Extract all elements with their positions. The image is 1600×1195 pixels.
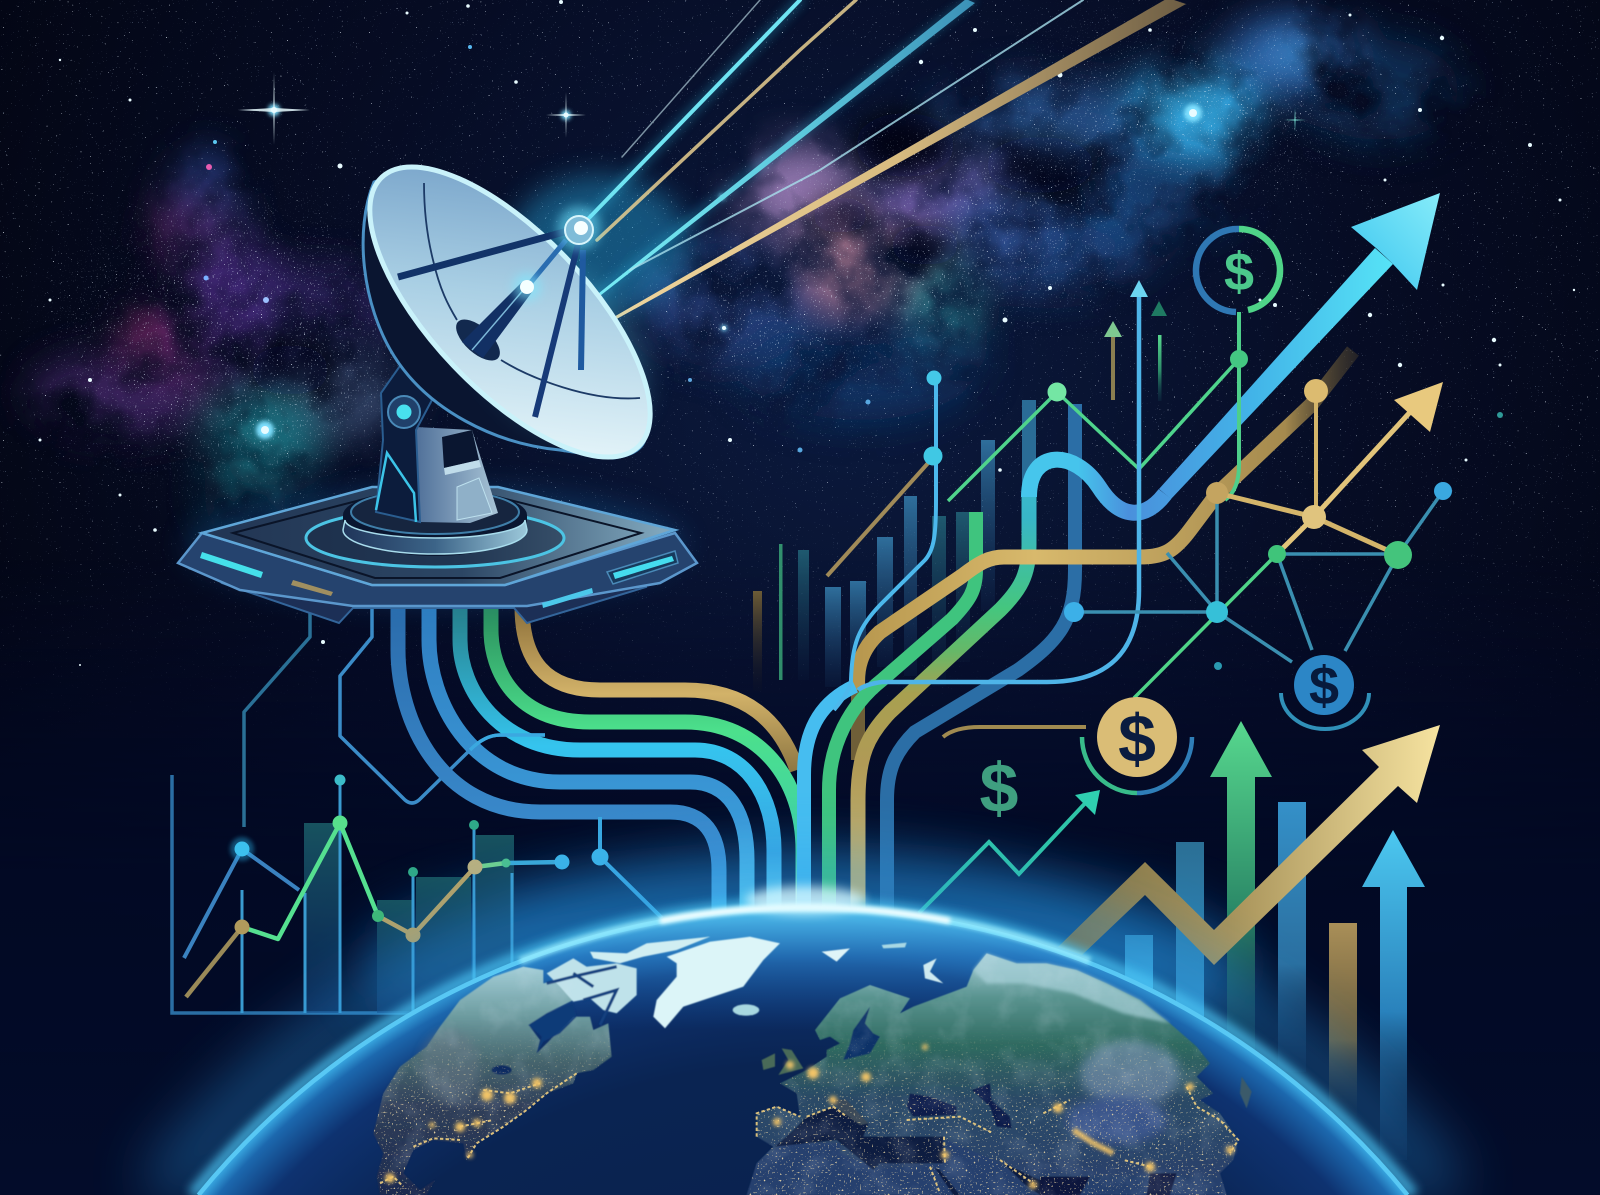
trace right <box>340 608 545 803</box>
gold and green chart line <box>186 823 562 997</box>
atmosphere rim <box>198 909 1408 1195</box>
arrow: dark green <box>1151 301 1167 401</box>
status bar right <box>607 551 678 584</box>
caspian sea <box>972 1083 1012 1128</box>
arrow: blue up <box>1362 830 1425 1160</box>
baltic sea <box>843 1007 880 1060</box>
column <box>376 363 498 523</box>
dish face <box>325 124 695 500</box>
ribbon: dark blue <box>398 606 719 925</box>
ribbon: dark blue fan <box>887 404 1075 925</box>
african and arabian land <box>747 1140 1033 1195</box>
continent: eurasia and north africa <box>747 943 1252 1195</box>
small up arrows <box>1104 280 1167 401</box>
ribbon: cyan <box>460 606 774 925</box>
arrow: gold zigzag <box>1058 725 1440 965</box>
dollar coin gold: $ <box>1118 701 1156 777</box>
continent: north america <box>373 937 780 1195</box>
top flare along rim <box>520 886 1090 961</box>
earth <box>162 880 1444 1195</box>
black sea <box>907 1093 957 1117</box>
atmosphere glow <box>162 880 1444 1195</box>
land texture <box>360 940 1260 1195</box>
dish back <box>363 172 646 458</box>
glow behind earth horizon <box>365 870 1245 1060</box>
italy <box>828 1098 868 1125</box>
green rising line chart <box>827 290 1248 710</box>
ribbon: gold main <box>858 351 1353 690</box>
bright stars <box>38 0 1575 666</box>
dollar ring top: $ <box>1224 242 1254 302</box>
dish glow <box>440 229 680 471</box>
american grey west <box>420 1030 480 1103</box>
line: thin cyan long <box>858 290 1139 690</box>
dark dust lanes <box>250 113 1095 395</box>
coastline city lights: eurasia <box>757 1087 1238 1193</box>
platform top <box>202 487 675 585</box>
tibet plateau <box>1067 1097 1167 1143</box>
himalaya light band <box>1073 1130 1113 1153</box>
platform inner panel <box>233 497 641 578</box>
ribbon: blue <box>429 606 747 925</box>
status bar left <box>200 552 263 578</box>
city glow clusters <box>385 1044 1234 1189</box>
greenland <box>653 937 780 1028</box>
hudson bay <box>528 1009 576 1050</box>
base collar <box>343 489 527 556</box>
chart axes <box>172 775 420 1013</box>
bright galaxy core <box>1150 39 1315 141</box>
british isles <box>762 1048 803 1075</box>
arrow: gold green <box>1104 321 1122 400</box>
ribbon fan: earth to charts <box>804 248 1393 925</box>
blue chart line <box>184 849 299 958</box>
ribbon: green fan <box>829 512 976 925</box>
northern siberia pale <box>973 953 1170 1023</box>
dollar coin gold <box>943 697 1192 793</box>
column cyan lines <box>376 453 416 522</box>
big arrowhead <box>1351 193 1440 290</box>
background bars: right chart <box>753 400 1036 760</box>
arrow: cyan <box>1130 280 1148 297</box>
cloud patch <box>1080 1040 1180 1107</box>
dollar ring top <box>1196 229 1280 312</box>
chart bars <box>304 823 514 1013</box>
red sea and gulf <box>935 1163 1040 1195</box>
column right panel <box>416 427 498 523</box>
teal zigzag arrow <box>919 790 1100 913</box>
glowing ring <box>306 509 564 567</box>
network graph <box>1064 379 1452 698</box>
network links: teal and blue <box>1074 491 1443 662</box>
beam: thin cyan <box>630 0 1083 270</box>
column window <box>442 430 479 468</box>
line: thin cyan branch <box>834 378 936 710</box>
trace left <box>244 608 310 827</box>
strut across dish <box>398 228 579 277</box>
arrow: green up <box>1210 721 1272 1060</box>
platform side <box>178 533 697 606</box>
rising bars and arrows lower right <box>1058 721 1440 1160</box>
dollar coin blue <box>1281 655 1369 729</box>
bottom fade to navy <box>0 560 1600 1195</box>
green dollar sign: $ <box>980 749 1018 827</box>
left line chart <box>172 774 570 1013</box>
nebula: left magenta and teal clouds <box>30 150 410 545</box>
svalbard <box>822 948 850 962</box>
pivot <box>388 396 420 428</box>
arrow: gold rising with green tail <box>1134 382 1443 698</box>
northern islands <box>590 937 710 963</box>
satellite dish station <box>178 124 697 623</box>
status bar gold <box>291 580 333 596</box>
nebula: milky way band at upper right <box>640 15 1460 420</box>
beam: cyan middle <box>594 0 975 299</box>
nodes on green line <box>1048 382 1066 402</box>
feed horn <box>462 282 532 358</box>
city lights texture <box>360 1030 1260 1195</box>
column window ledge <box>444 460 481 475</box>
beam: cyan top <box>589 0 800 218</box>
arctic straits <box>547 967 617 1025</box>
ribbon: green <box>491 606 803 925</box>
ribbon: gold <box>522 606 797 770</box>
hub <box>557 206 601 250</box>
coastline city lights: america <box>380 1073 577 1187</box>
beam: gold top <box>597 0 856 240</box>
trace overlapping ribbons <box>470 735 545 750</box>
dish panel arcs <box>424 183 640 398</box>
network nodes <box>1206 482 1228 504</box>
circuit traces from platform <box>244 608 545 827</box>
node on lower ribbon <box>592 817 662 918</box>
column left <box>376 363 432 522</box>
ribbon: big arrow hump <box>1029 460 1165 513</box>
great lakes <box>492 1065 512 1075</box>
mediterranean sea <box>775 1107 943 1170</box>
ocean top light <box>411 912 1196 1018</box>
beam: gold lower <box>612 0 1186 321</box>
platform <box>178 485 697 623</box>
signal beams from dish feed <box>510 0 1186 321</box>
ribbon: lower gold and green <box>858 495 1029 925</box>
chart stems <box>242 780 512 1013</box>
iceland <box>733 1004 759 1016</box>
dollar coin blue: $ <box>1309 656 1339 716</box>
arctic archipelago <box>547 958 637 1013</box>
platform underside <box>222 570 646 623</box>
feed lamp <box>513 273 541 301</box>
ribbon: cyan fan <box>804 686 855 925</box>
feed shadow <box>449 312 507 368</box>
franz josef islands <box>882 943 907 948</box>
japan <box>1240 1077 1252 1108</box>
status bar small <box>542 588 593 608</box>
ribbon bundle: platform to earth <box>398 606 803 925</box>
indian ocean and bay of bengal <box>1040 1173 1177 1195</box>
network links: gold <box>1217 493 1398 555</box>
star fields <box>0 0 1600 760</box>
dense stars in nebula band <box>26 0 1385 512</box>
ribbon: big arrow tapered shaft <box>1159 248 1393 499</box>
novaya zemlya <box>923 958 943 983</box>
globe sphere <box>198 908 1408 1195</box>
line: green riser <box>1225 312 1239 500</box>
long struts <box>527 240 583 417</box>
line: gold diagonal <box>827 462 929 576</box>
column light panel <box>457 478 492 520</box>
beam: thin white <box>622 0 760 157</box>
chart nodes <box>230 774 570 942</box>
